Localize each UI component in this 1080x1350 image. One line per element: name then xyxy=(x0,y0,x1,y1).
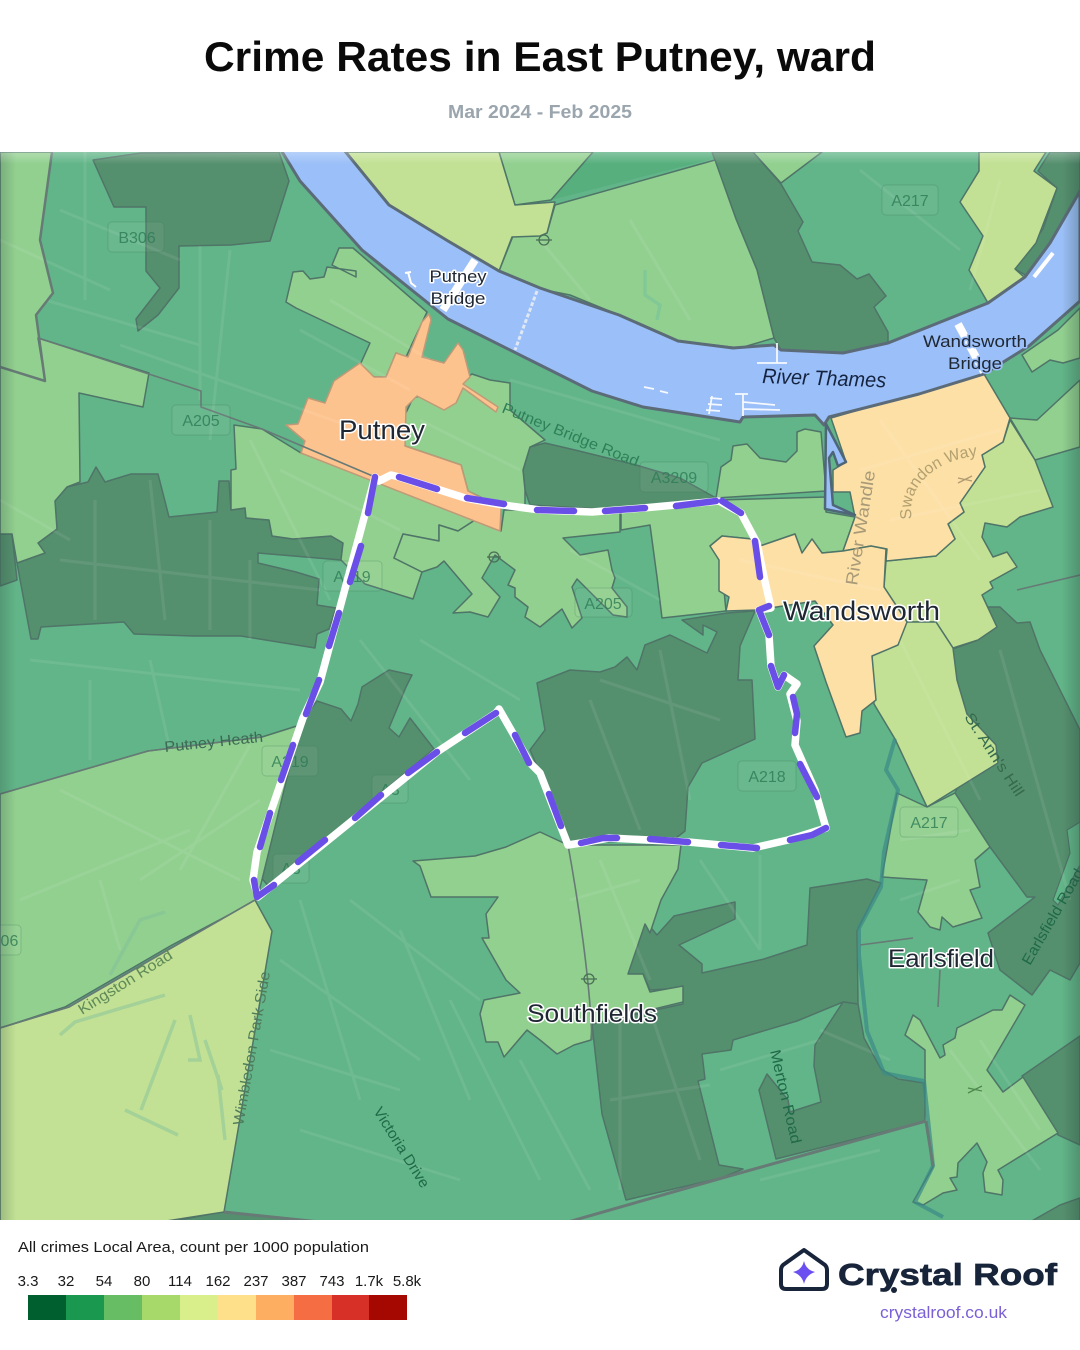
logo tail dot on the y xyxy=(891,1287,897,1293)
road label St. Ann's Hill: St. Ann's Hill xyxy=(961,710,1027,800)
badge A219 north: A219 xyxy=(333,569,371,586)
icon: house with star xyxy=(781,1250,827,1289)
road label Putney Bridge Road: Putney Bridge Road xyxy=(500,400,641,470)
subtitle: date range: Mar 2024 - Feb 2025 xyxy=(448,102,632,122)
legend xyxy=(18,1239,422,1320)
badge B306: B306 xyxy=(118,230,156,247)
ward boundary: East Putney xyxy=(253,475,826,897)
place label Putney Bridge: Putney xyxy=(430,267,487,286)
legend scale labels: 3.3 xyxy=(18,1273,38,1290)
road label Merton Road: Merton Road xyxy=(766,1048,804,1145)
badge A217 north xyxy=(882,185,938,215)
street network xyxy=(0,152,1070,1190)
crime-rate area: orange band, Putney xyxy=(286,314,501,531)
brand URL: crystalroof.co.uk xyxy=(880,1304,1008,1322)
road label Kingston Road: Kingston Road xyxy=(75,947,176,1018)
road label Swandon Way: Swandon Way xyxy=(900,447,976,518)
brand name: Crystal Roof xyxy=(838,1257,1058,1292)
place label Southfields: Southfields xyxy=(527,1000,657,1028)
river: River Wandle mouth xyxy=(825,424,855,515)
legend scale labels: 1.7k xyxy=(355,1273,384,1290)
place label Putney: Putney xyxy=(339,415,426,445)
badge A205 centre: A205 xyxy=(584,596,622,613)
badge A3209 xyxy=(640,462,708,492)
river: Wandle channel xyxy=(859,739,943,1217)
road label Wimbledon Park Side: Wimbledon Park Side xyxy=(230,970,274,1127)
water label River Thames: River Thames xyxy=(762,365,887,392)
badge A306 cut off xyxy=(0,925,21,955)
logo: Crystal Roof xyxy=(781,1250,1058,1322)
place label Putney Bridge xyxy=(430,267,487,308)
mid green strip along Earlsfield Road xyxy=(1053,822,1080,905)
crime-rate areas: light green band xyxy=(0,152,1080,1205)
badge A217 south xyxy=(900,807,958,837)
badge A219 south: A219 xyxy=(271,754,309,771)
street names xyxy=(78,402,1080,1188)
legend colour ramp xyxy=(28,1295,407,1320)
crime-rate areas: pale yellow-green band xyxy=(0,152,1057,1222)
place label Wandsworth Bridge: Bridge xyxy=(948,354,1002,373)
badge A217 south: A217 xyxy=(910,815,948,832)
river: River Thames xyxy=(281,150,1080,425)
badge A3 xyxy=(380,777,408,804)
crime-rate areas: amber band, Wandsworth xyxy=(710,374,1010,737)
badge A205 centre xyxy=(575,588,632,617)
badge A218 xyxy=(738,761,796,791)
place label Putney Bridge: Bridge xyxy=(430,289,486,308)
station icons xyxy=(487,235,982,1093)
legend scale labels: 237 xyxy=(243,1273,269,1290)
road label Victoria Drive: Victoria Drive xyxy=(370,1104,433,1191)
legend heading: All crimes Local Area, count per 1000 population xyxy=(18,1239,369,1256)
badge A205 west xyxy=(172,405,230,435)
badge A3 lower: A3 xyxy=(281,861,301,878)
legend scale labels: 5.8k xyxy=(393,1273,422,1290)
place label Wandsworth Bridge: Wandsworth xyxy=(923,332,1027,351)
badge A3209: A3209 xyxy=(651,470,697,487)
crime-rate areas: darkest green band xyxy=(0,152,1080,1230)
badge A219 south xyxy=(262,746,308,776)
map edge vignette xyxy=(0,152,1080,1220)
badge B306 xyxy=(108,222,164,252)
ward dashes purple xyxy=(254,477,826,897)
legend scale labels: 114 xyxy=(168,1273,192,1290)
place label Wandsworth Bridge xyxy=(923,332,1027,373)
legend scale labels: 54 xyxy=(96,1273,112,1290)
legend scale labels: 387 xyxy=(281,1273,307,1290)
badge A3: A3 xyxy=(380,782,400,799)
place label Wandsworth: Wandsworth xyxy=(783,596,940,626)
legend scale labels: 743 xyxy=(319,1273,345,1290)
choropleth map panel xyxy=(0,152,1080,1220)
legend scale labels: 32 xyxy=(58,1273,74,1290)
place label Earlsfield: Earlsfield xyxy=(888,945,994,973)
title: Crime Rates in East Putney, ward xyxy=(204,33,876,80)
legend scale labels: 162 xyxy=(205,1273,231,1290)
badge A217 north: A217 xyxy=(891,193,929,210)
badge A3 lower xyxy=(281,860,310,884)
badge A218: A218 xyxy=(748,769,786,786)
road label Putney Heath: Putney Heath xyxy=(164,729,264,756)
badge A219 north xyxy=(323,561,382,591)
saturated green area north of the river xyxy=(551,152,716,200)
legend scale labels: 80 xyxy=(134,1273,150,1290)
bridges and river piers xyxy=(405,253,1053,416)
water label River Wandle: River Wandle xyxy=(842,469,879,587)
major boundary lines xyxy=(0,152,1080,1230)
ward outline white xyxy=(253,475,826,897)
badge A205 west: A205 xyxy=(182,413,220,430)
legend scale labels xyxy=(18,1273,422,1290)
ponds and streams on the commons xyxy=(60,270,660,1140)
road number badges xyxy=(0,185,958,955)
